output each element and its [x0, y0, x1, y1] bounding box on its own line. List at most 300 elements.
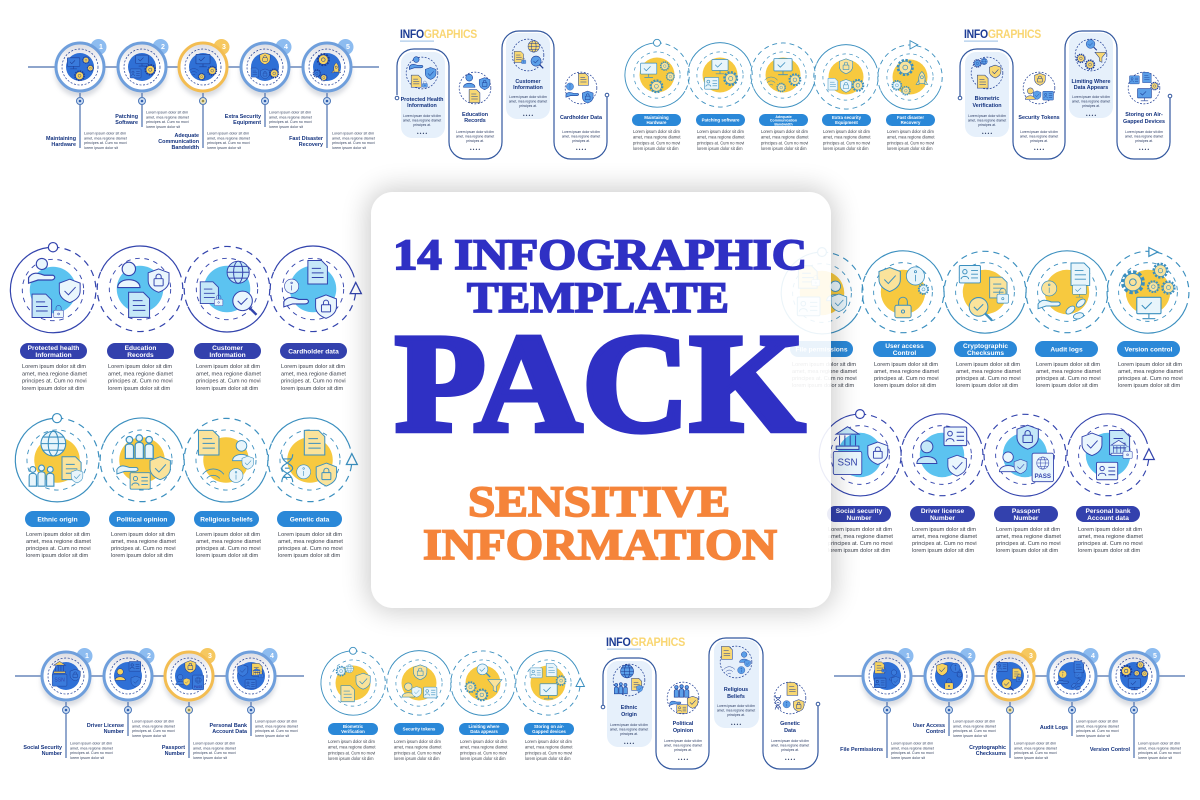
- item: Education Records: principes at. Cum no movi: [108, 379, 173, 385]
- panel: top vertical rounded template (health, education, customer, cardholder): [395, 27, 609, 159]
- column: Genetic Data: [771, 682, 809, 762]
- item: Cardholder data: principes at. Cum no movi: [281, 379, 346, 385]
- step 1: Maintaining Hardware: lorem ipsum dolor sit: [84, 146, 118, 150]
- step 4: Personal Bank Account Data: lorem ipsum dolor sit: [255, 734, 289, 738]
- item: Extra security Equipment: [814, 45, 878, 151]
- step 3: Cryptographic Checksums: [969, 648, 1057, 760]
- column: Protected Health Information: amet, mea regione diamet: [403, 118, 441, 122]
- item: Extra security Equipment: lorem ipsum dolor sit dim: [823, 146, 869, 151]
- column: Customer Information: Customer: [515, 79, 541, 85]
- central white card: [370, 192, 830, 608]
- column: Storing on Air-Gapped Devices: principes at.: [1135, 139, 1153, 143]
- item: Version control: amet, mea regione diamet: [1118, 369, 1183, 375]
- column: Ethnic Origin: Origin: [621, 712, 637, 718]
- panel: lower-right circle chain (SSN, license, passport, bank): [819, 410, 1154, 554]
- step 4: Personal Bank Account Data: Personal Bank: [210, 723, 247, 729]
- item: Genetic data: Lorem ipsum dolor sit dim: [278, 532, 342, 538]
- item: Fast disaster Recovery: amet, mea regione diamet: [887, 135, 935, 140]
- column: Genetic Data: principes at.: [781, 748, 799, 752]
- item: Education Records: Records: [127, 352, 154, 359]
- item: Driver license Number: amet, mea regione diamet: [912, 534, 977, 540]
- item: Personal bank Account data: principes at. Cum no movi: [1078, 541, 1143, 547]
- step 4: Extra Security Equipment: Lorem ipsum dolor sit dim: [269, 110, 311, 114]
- column: Religious Beliefs: amet, mea regione diamet: [717, 708, 755, 712]
- item: Security tokens: [387, 651, 451, 761]
- step 1: Social Security Number: 1: [85, 653, 89, 660]
- item: Genetic data: lorem ipsum dolor sit dim: [278, 553, 341, 559]
- item: Adequate Communication Bandwidth: lorem ipsum dolor sit dim: [761, 146, 807, 151]
- step 2: Driver License Number: Number: [104, 729, 125, 735]
- item: Driver license Number: [901, 414, 983, 554]
- item: Protected health Information: lorem ipsum dolor sit dim: [22, 386, 85, 392]
- step 4: Personal Bank Account Data: Lorem ipsum dolor sit dim: [255, 720, 297, 724]
- item: Ethnic origin: amet, mea regione diamet: [26, 539, 91, 545]
- item: Genetic data: [268, 418, 357, 559]
- column: Limiting Where Data Appears: Limiting Where: [1072, 79, 1110, 85]
- heading: INFOGRAPHICS: INFOGRAPHICS: [606, 635, 685, 649]
- column: Education Records: principes at.: [466, 139, 484, 143]
- title line: 14 INFOGRAPHIC: 14 INFOGRAPHIC: [393, 232, 807, 279]
- title line: PACK: PACK: [395, 306, 805, 462]
- item: Protected health Information: Protected health: [28, 345, 79, 352]
- item: Version control: lorem ipsum dolor sit dim: [1118, 383, 1181, 389]
- subtitle line: INFORMATION: INFORMATION: [423, 522, 777, 569]
- step 4: Extra Security Equipment: principes at. Cum no movi: [269, 120, 312, 124]
- step 4: Personal Bank Account Data: amet, mea regione diamet: [255, 724, 298, 728]
- panel: top-left timeline: [28, 39, 379, 151]
- item: Customer Information: amet, mea regione diamet: [196, 371, 261, 377]
- step 2: User Access Control: 2: [968, 653, 972, 660]
- item: Cardholder data: [270, 246, 361, 392]
- item: Limiting where Data appears: Lorem ipsum dolor sit dim: [460, 739, 507, 744]
- item: Education Records: [97, 246, 183, 392]
- step 1: File Permissions: [840, 648, 934, 760]
- step 2: Patching Software: amet, mea regione diamet: [146, 115, 189, 119]
- item: Biometric Verification: amet, mea regione diamet: [328, 745, 376, 750]
- item: Protected health Information: amet, mea regione diamet: [22, 371, 87, 377]
- item: Version control: [1107, 248, 1189, 389]
- column: Political Opinion: principes at.: [674, 748, 692, 752]
- column: Limiting Where Data Appears: [1072, 39, 1110, 118]
- column: Biometric Verification: Lorem ipsum dolor sit dim: [968, 114, 1006, 118]
- column: Religious Beliefs: Lorem ipsum dolor sit dim: [717, 704, 755, 708]
- item: Driver license Number: lorem ipsum dolor sit dim: [912, 548, 975, 554]
- item: Genetic data: principes at. Cum no movi: [278, 546, 343, 552]
- item: Fast disaster Recovery: [878, 41, 942, 151]
- step 1: Social Security Number: Lorem ipsum dolor sit dim: [70, 742, 112, 746]
- item: Storing on air-Gapped devices: Gapped devices: [532, 729, 566, 734]
- column: Political Opinion: Opinion: [673, 728, 693, 734]
- column: Education Records: • • • •: [470, 147, 480, 152]
- step 4: Audit Logs: principes at. Cum no movi: [1076, 729, 1119, 733]
- item: Extra security Equipment: Lorem ipsum dolor sit dim: [823, 129, 870, 134]
- item: Personal bank Account data: Account data: [1087, 515, 1129, 522]
- column: Cardholder Data: [560, 72, 603, 152]
- step 3: Passport Number: Number: [165, 751, 186, 757]
- item: Audit logs: Lorem ipsum dolor sit dim: [1036, 362, 1100, 368]
- step 1: File Permissions: amet, mea regione diamet: [891, 746, 934, 750]
- item: Biometric Verification: [321, 647, 385, 761]
- step 4: Extra Security Equipment: [225, 39, 312, 129]
- panel: top circle chain (maintaining to recovery): [625, 39, 942, 151]
- column: Cardholder Data: • • • •: [576, 147, 586, 152]
- item: Version control: Version control: [1124, 346, 1173, 354]
- step 2: Driver License Number: [87, 648, 175, 738]
- item: Personal bank Account data: Lorem ipsum dolor sit dim: [1078, 527, 1142, 533]
- column: Limiting Where Data Appears: Data Appears: [1074, 85, 1108, 91]
- column: Security Tokens: principes at.: [1030, 139, 1048, 143]
- item: Maintaining Hardware: [625, 39, 689, 151]
- step 4: Extra Security Equipment: lorem ipsum dolor sit: [269, 125, 303, 129]
- item: Social security Number: Social security: [836, 508, 883, 515]
- column: Ethnic Origin: amet, mea regione diamet: [610, 727, 648, 731]
- step 4: Personal Bank Account Data: Account Data: [212, 729, 248, 735]
- column: Protected Health Information: Lorem ipsum dolor sit dim: [403, 114, 441, 118]
- column: Political Opinion: • • • •: [678, 757, 688, 762]
- panel: bottom-left timeline: [15, 648, 304, 760]
- column: Protected Health Information: • • • •: [417, 131, 427, 136]
- item: Education Records: lorem ipsum dolor sit dim: [108, 386, 171, 392]
- item: Social security Number: Number: [847, 515, 872, 522]
- step 2: Patching Software: Patching: [115, 114, 138, 120]
- step 3: Passport Number: principes at. Cum no movi: [193, 751, 236, 755]
- step 3: Passport Number: 3: [208, 653, 212, 660]
- item: Limiting where Data appears: [451, 651, 515, 761]
- column: Storing on Air-Gapped Devices: [1123, 72, 1165, 152]
- step 4: Audit Logs: 4: [1091, 653, 1095, 660]
- item: Biometric Verification: Lorem ipsum dolor sit dim: [328, 739, 375, 744]
- step 1: Maintaining Hardware: Maintaining: [46, 136, 76, 142]
- column: Limiting Where Data Appears: Lorem ipsum dolor sit dim: [1072, 95, 1110, 99]
- item: Political opinion: Lorem ipsum dolor sit dim: [111, 532, 175, 538]
- column: Education Records: Lorem ipsum dolor sit dim: [456, 130, 494, 134]
- panel: bottom circle chain (biometric to air-gapped): [321, 647, 584, 761]
- step 4: Extra Security Equipment: Equipment: [233, 120, 261, 126]
- item: Ethnic origin: Lorem ipsum dolor sit dim: [26, 532, 90, 538]
- step 1: Maintaining Hardware: Lorem ipsum dolor sit dim: [84, 132, 126, 136]
- item: Passport Number: Number: [1014, 515, 1039, 522]
- item: Driver license Number: Driver license: [921, 508, 964, 515]
- step 4: Extra Security Equipment: 4: [284, 44, 288, 51]
- step 3: Adequate Communication Bandwidth: Adequate: [174, 133, 199, 139]
- column: Security Tokens: Security Tokens: [1018, 115, 1060, 121]
- column: Storing on Air-Gapped Devices: Gapped Devices: [1123, 119, 1165, 125]
- item: User access Control: principes at. Cum no movi: [874, 376, 939, 382]
- item: Patching software: lorem ipsum dolor sit dim: [697, 146, 743, 151]
- item: Patching software: Lorem ipsum dolor sit dim: [697, 129, 744, 134]
- item: User access Control: [862, 251, 944, 389]
- column: Customer Information: amet, mea regione diamet: [509, 99, 547, 103]
- item: Adequate Communication Bandwidth: principes at. Cum no movi: [761, 140, 808, 145]
- step 4: Audit Logs: [1040, 648, 1119, 738]
- item: Political opinion: lorem ipsum dolor sit dim: [111, 553, 174, 559]
- item: Cryptographic Checksums: amet, mea regione diamet: [956, 369, 1021, 375]
- step 3: Cryptographic Checksums: Checksums: [976, 751, 1006, 757]
- item: Ethnic origin: [15, 414, 99, 559]
- item: Cryptographic Checksums: Lorem ipsum dolor sit dim: [956, 362, 1020, 368]
- item: File permissions: lorem ipsum dolor sit dim: [792, 383, 855, 389]
- column: Religious Beliefs: • • • •: [731, 722, 741, 727]
- item: Passport Number: principes at. Cum no movi: [996, 541, 1061, 547]
- item: Patching software: Patching software: [702, 118, 740, 122]
- item: Cryptographic Checksums: [944, 251, 1026, 389]
- step 2: User Access Control: User Access: [913, 723, 945, 729]
- item: Limiting where Data appears: Data appears: [470, 729, 498, 734]
- step 2: Patching Software: principes at. Cum no movi: [146, 120, 189, 124]
- step 2: Patching Software: lorem ipsum dolor sit: [146, 125, 180, 129]
- step 2: Patching Software: [115, 39, 189, 129]
- step 3: Cryptographic Checksums: lorem ipsum dolor sit: [1014, 756, 1048, 760]
- item: Religious beliefs: principes at. Cum no movi: [196, 546, 261, 552]
- item: Adequate Communication Bandwidth: [751, 43, 815, 151]
- item: Biometric Verification: lorem ipsum dolor sit dim: [328, 756, 374, 761]
- item: Maintaining Hardware: principes at. Cum no movi: [633, 140, 680, 145]
- item: Religious beliefs: amet, mea regione diamet: [196, 539, 261, 545]
- column: Biometric Verification: principes at.: [978, 123, 996, 127]
- column: Biometric Verification: Biometric: [975, 96, 999, 102]
- item: Biometric Verification: Verification: [341, 729, 365, 734]
- item: File permissions: principes at. Cum no movi: [792, 376, 857, 382]
- item: Social security Number: amet, mea regione diamet: [828, 534, 893, 540]
- step 1: Social Security Number: Number: [42, 751, 63, 757]
- step 3: Cryptographic Checksums: amet, mea regione diamet: [1014, 746, 1057, 750]
- item: Limiting where Data appears: Limiting where: [469, 724, 500, 729]
- column: Limiting Where Data Appears: • • • •: [1086, 113, 1096, 118]
- item: Cryptographic Checksums: lorem ipsum dolor sit dim: [956, 383, 1019, 389]
- column: Cardholder Data: principes at.: [572, 139, 590, 143]
- item: File permissions: Lorem ipsum dolor sit dim: [792, 362, 856, 368]
- item: Personal bank Account data: amet, mea regione diamet: [1078, 534, 1143, 540]
- item: Protected health Information: Lorem ipsum dolor sit dim: [22, 364, 86, 370]
- item: Political opinion: principes at. Cum no movi: [111, 546, 176, 552]
- column: Education Records: amet, mea regione diamet: [456, 134, 494, 138]
- heading: INFOGRAPHICS: INFOGRAPHICS: [964, 27, 1041, 41]
- item: Audit logs: Audit logs: [1050, 346, 1083, 354]
- step 3: Passport Number: amet, mea regione diamet: [193, 746, 236, 750]
- item: Security tokens: Security tokens: [403, 726, 436, 732]
- item: Storing on air-Gapped devices: amet, mea regione diamet: [525, 745, 573, 750]
- step 5: Version Control: 5: [1153, 653, 1157, 660]
- column: Customer Information: Lorem ipsum dolor sit dim: [509, 95, 547, 99]
- item: Fast disaster Recovery: lorem ipsum dolor sit dim: [887, 146, 933, 151]
- item: Maintaining Hardware: Maintaining: [644, 115, 669, 120]
- title line: TEMPLATE: TEMPLATE: [467, 275, 729, 322]
- column: Biometric Verification: amet, mea regione diamet: [968, 118, 1006, 122]
- step 2: Driver License Number: Lorem ipsum dolor sit dim: [132, 720, 174, 724]
- item: Patching software: [688, 43, 752, 151]
- column: Religious Beliefs: Beliefs: [727, 694, 745, 700]
- column: Genetic Data: amet, mea regione diamet: [771, 743, 809, 747]
- item: Adequate Communication Bandwidth: amet, mea regione diamet: [761, 135, 809, 140]
- column: Limiting Where Data Appears: principes at.: [1082, 104, 1100, 108]
- panel: mid-right circle chain (permissions, access, checksums, logs, version): [781, 248, 1189, 389]
- item: Extra security Equipment: amet, mea regione diamet: [823, 135, 871, 140]
- step 1: Social Security Number: [23, 648, 113, 760]
- item: Protected health Information: principes at. Cum no movi: [22, 379, 87, 385]
- item: Audit logs: [1026, 251, 1108, 389]
- step 5: Version Control: [1090, 648, 1181, 760]
- column: Ethnic Origin: principes at.: [620, 732, 638, 736]
- step 2: Driver License Number: 2: [147, 653, 151, 660]
- column: Security Tokens: Lorem ipsum dolor sit dim: [1020, 130, 1058, 134]
- step 3: Adequate Communication Bandwidth: Lorem ipsum dolor sit dim: [207, 132, 249, 136]
- item: Version control: Lorem ipsum dolor sit dim: [1118, 362, 1182, 368]
- item: Adequate Communication Bandwidth: Communication: [770, 119, 797, 123]
- step 1: Maintaining Hardware: 1: [99, 44, 103, 51]
- item: Storing on air-Gapped devices: lorem ipsum dolor sit dim: [525, 756, 571, 761]
- item: Ethnic origin: Ethnic origin: [37, 516, 78, 524]
- step 1: Maintaining Hardware: Hardware: [51, 142, 76, 148]
- item: Passport Number: Passport: [1012, 508, 1041, 515]
- item: Driver license Number: Number: [930, 515, 955, 522]
- item: Extra security Equipment: Equipment: [835, 120, 858, 125]
- item: Social security Number: lorem ipsum dolor sit dim: [828, 548, 891, 554]
- item: Adequate Communication Bandwidth: Bandwidth: [774, 122, 793, 126]
- item: Education Records: Lorem ipsum dolor sit dim: [108, 364, 172, 370]
- item: Patching software: principes at. Cum no movi: [697, 140, 744, 145]
- item: Customer Information: [184, 246, 270, 392]
- column: Religious Beliefs: [717, 646, 755, 727]
- step 2: Driver License Number: lorem ipsum dolor sit: [132, 734, 166, 738]
- step 4: Extra Security Equipment: Extra Security: [225, 114, 261, 120]
- item: Adequate Communication Bandwidth: Adequate: [775, 115, 792, 119]
- item: Extra security Equipment: Extra security: [832, 115, 862, 120]
- step 5: Fast Disaster Recovery: amet, mea regione diamet: [332, 136, 375, 140]
- step 2: Driver License Number: amet, mea regione diamet: [132, 724, 175, 728]
- item: Cardholder data: Lorem ipsum dolor sit dim: [281, 364, 345, 370]
- item: Audit logs: principes at. Cum no movi: [1036, 376, 1101, 382]
- step 5: Fast Disaster Recovery: Fast Disaster: [289, 136, 324, 142]
- item: Driver license Number: Lorem ipsum dolor sit dim: [912, 527, 976, 533]
- step 4: Audit Logs: Audit Logs: [1040, 725, 1068, 731]
- item: Cryptographic Checksums: Checksums: [967, 350, 1004, 357]
- column: Genetic Data: Genetic: [780, 721, 800, 727]
- item: Political opinion: Political opinion: [117, 516, 167, 524]
- step 1: Social Security Number: principes at. Cum no movi: [70, 751, 113, 755]
- step 3: Adequate Communication Bandwidth: Bandwidth: [171, 145, 199, 151]
- step 2: User Access Control: amet, mea regione diamet: [953, 724, 996, 728]
- item: Protected health Information: [10, 243, 96, 392]
- subtitle line: SENSITIVE: SENSITIVE: [468, 479, 730, 526]
- item: Maintaining Hardware: Hardware: [646, 120, 667, 125]
- panel: top-right vertical rounded template (biometric, tokens, limiting, air-gapped): [958, 27, 1172, 159]
- step 3: Adequate Communication Bandwidth: 3: [222, 44, 226, 51]
- step 1: File Permissions: 1: [906, 653, 910, 660]
- step 3: Passport Number: Passport: [162, 745, 185, 751]
- item: Limiting where Data appears: lorem ipsum dolor sit dim: [460, 756, 506, 761]
- column: Education Records: Education: [462, 112, 488, 118]
- column: Political Opinion: [664, 682, 702, 762]
- column: Security Tokens: • • • •: [1034, 147, 1044, 152]
- item: User access Control: Control: [893, 350, 916, 357]
- item: Personal bank Account data: Personal bank: [1085, 508, 1131, 515]
- column: Biometric Verification: [968, 57, 1006, 136]
- step 2: User Access Control: principes at. Cum no movi: [953, 729, 996, 733]
- item: Passport Number: Lorem ipsum dolor sit dim: [996, 527, 1060, 533]
- item: Storing on air-Gapped devices: [516, 651, 584, 761]
- item: Customer Information: Customer: [212, 345, 243, 352]
- step 5: Fast Disaster Recovery: 5: [346, 44, 350, 51]
- step 5: Version Control: Version Control: [1090, 747, 1130, 753]
- item: Religious beliefs: Religious beliefs: [200, 516, 253, 524]
- column: Customer Information: Information: [513, 85, 543, 91]
- step 1: File Permissions: Lorem ipsum dolor sit dim: [891, 742, 933, 746]
- item: Security tokens: Lorem ipsum dolor sit dim: [394, 739, 441, 744]
- item: Religious beliefs: Lorem ipsum dolor sit dim: [196, 532, 260, 538]
- item: File permissions: [781, 248, 863, 389]
- column: Religious Beliefs: Religious: [724, 687, 748, 693]
- item: Fast disaster Recovery: Recovery: [901, 120, 921, 125]
- column: Customer Information: principes at.: [519, 104, 537, 108]
- step 3: Passport Number: Lorem ipsum dolor sit dim: [193, 742, 235, 746]
- item: Maintaining Hardware: amet, mea regione diamet: [633, 135, 681, 140]
- step 3: Adequate Communication Bandwidth: [158, 39, 250, 151]
- item: Version control: principes at. Cum no movi: [1118, 376, 1183, 382]
- item: File permissions: File permissions: [795, 346, 848, 354]
- item: Genetic data: Genetic data: [290, 516, 330, 524]
- item: Cardholder data: Cardholder data: [288, 348, 339, 356]
- step 3: Cryptographic Checksums: Lorem ipsum dolor sit dim: [1014, 742, 1056, 746]
- item: Storing on air-Gapped devices: Storing on air-: [534, 724, 565, 729]
- item: Cardholder data: lorem ipsum dolor sit dim: [281, 386, 344, 392]
- step 5: Fast Disaster Recovery: lorem ipsum dolor sit: [332, 146, 366, 150]
- column: Storing on Air-Gapped Devices: amet, mea regione diamet: [1125, 134, 1163, 138]
- step 3: Cryptographic Checksums: 3: [1029, 653, 1033, 660]
- item: Religious beliefs: lorem ipsum dolor sit dim: [196, 553, 259, 559]
- column: Biometric Verification: Verification: [972, 103, 1002, 109]
- step 1: Maintaining Hardware: [46, 39, 127, 150]
- column: Storing on Air-Gapped Devices: Storing on Air-: [1125, 112, 1163, 118]
- item: Cryptographic Checksums: Cryptographic: [963, 343, 1008, 350]
- column: Religious Beliefs: principes at.: [727, 713, 745, 717]
- step 1: File Permissions: lorem ipsum dolor sit: [891, 756, 925, 760]
- item: Passport Number: lorem ipsum dolor sit dim: [996, 548, 1059, 554]
- step 2: User Access Control: [913, 648, 996, 738]
- step 5: Version Control: lorem ipsum dolor sit: [1138, 756, 1172, 760]
- item: User access Control: amet, mea regione diamet: [874, 369, 939, 375]
- step 3: Adequate Communication Bandwidth: lorem ipsum dolor sit: [207, 146, 241, 150]
- item: Ethnic origin: lorem ipsum dolor sit dim: [26, 553, 89, 559]
- item: User access Control: User access: [885, 343, 924, 350]
- item: Security tokens: lorem ipsum dolor sit dim: [394, 756, 440, 761]
- item: User access Control: Lorem ipsum dolor sit dim: [874, 362, 938, 368]
- item: Political opinion: amet, mea regione diamet: [111, 539, 176, 545]
- column: Limiting Where Data Appears: amet, mea regione diamet: [1072, 99, 1110, 103]
- step 4: Personal Bank Account Data: principes at. Cum no movi: [255, 729, 298, 733]
- item: Social security Number: principes at. Cum no movi: [828, 541, 893, 547]
- item: Customer Information: principes at. Cum no movi: [196, 379, 261, 385]
- item: Patching software: amet, mea regione diamet: [697, 135, 745, 140]
- item: Maintaining Hardware: lorem ipsum dolor sit dim: [633, 146, 679, 151]
- item: Fast disaster Recovery: Lorem ipsum dolor sit dim: [887, 129, 934, 134]
- step 3: Cryptographic Checksums: principes at. Cum no movi: [1014, 751, 1057, 755]
- step 5: Fast Disaster Recovery: principes at. Cum no movi: [332, 141, 375, 145]
- column: Biometric Verification: • • • •: [982, 131, 992, 136]
- step 1: Social Security Number: Social Security: [23, 745, 62, 751]
- column: Ethnic Origin: Ethnic: [621, 705, 637, 711]
- step 1: Social Security Number: amet, mea regione diamet: [70, 746, 113, 750]
- column: Security Tokens: [1018, 72, 1060, 152]
- item: Fast disaster Recovery: Fast disaster: [897, 115, 924, 120]
- step 1: Maintaining Hardware: principes at. Cum no movi: [84, 141, 127, 145]
- panel: mid-left circle chain (health records): [10, 243, 361, 392]
- step 2: Driver License Number: principes at. Cum no movi: [132, 729, 175, 733]
- item: Limiting where Data appears: amet, mea regione diamet: [460, 745, 508, 750]
- item: Cardholder data: amet, mea regione diamet: [281, 371, 346, 377]
- column: Storing on Air-Gapped Devices: Lorem ipsum dolor sit dim: [1125, 130, 1163, 134]
- step 2: Patching Software: Lorem ipsum dolor sit dim: [146, 110, 188, 114]
- step 3: Adequate Communication Bandwidth: amet, mea regione diamet: [207, 136, 250, 140]
